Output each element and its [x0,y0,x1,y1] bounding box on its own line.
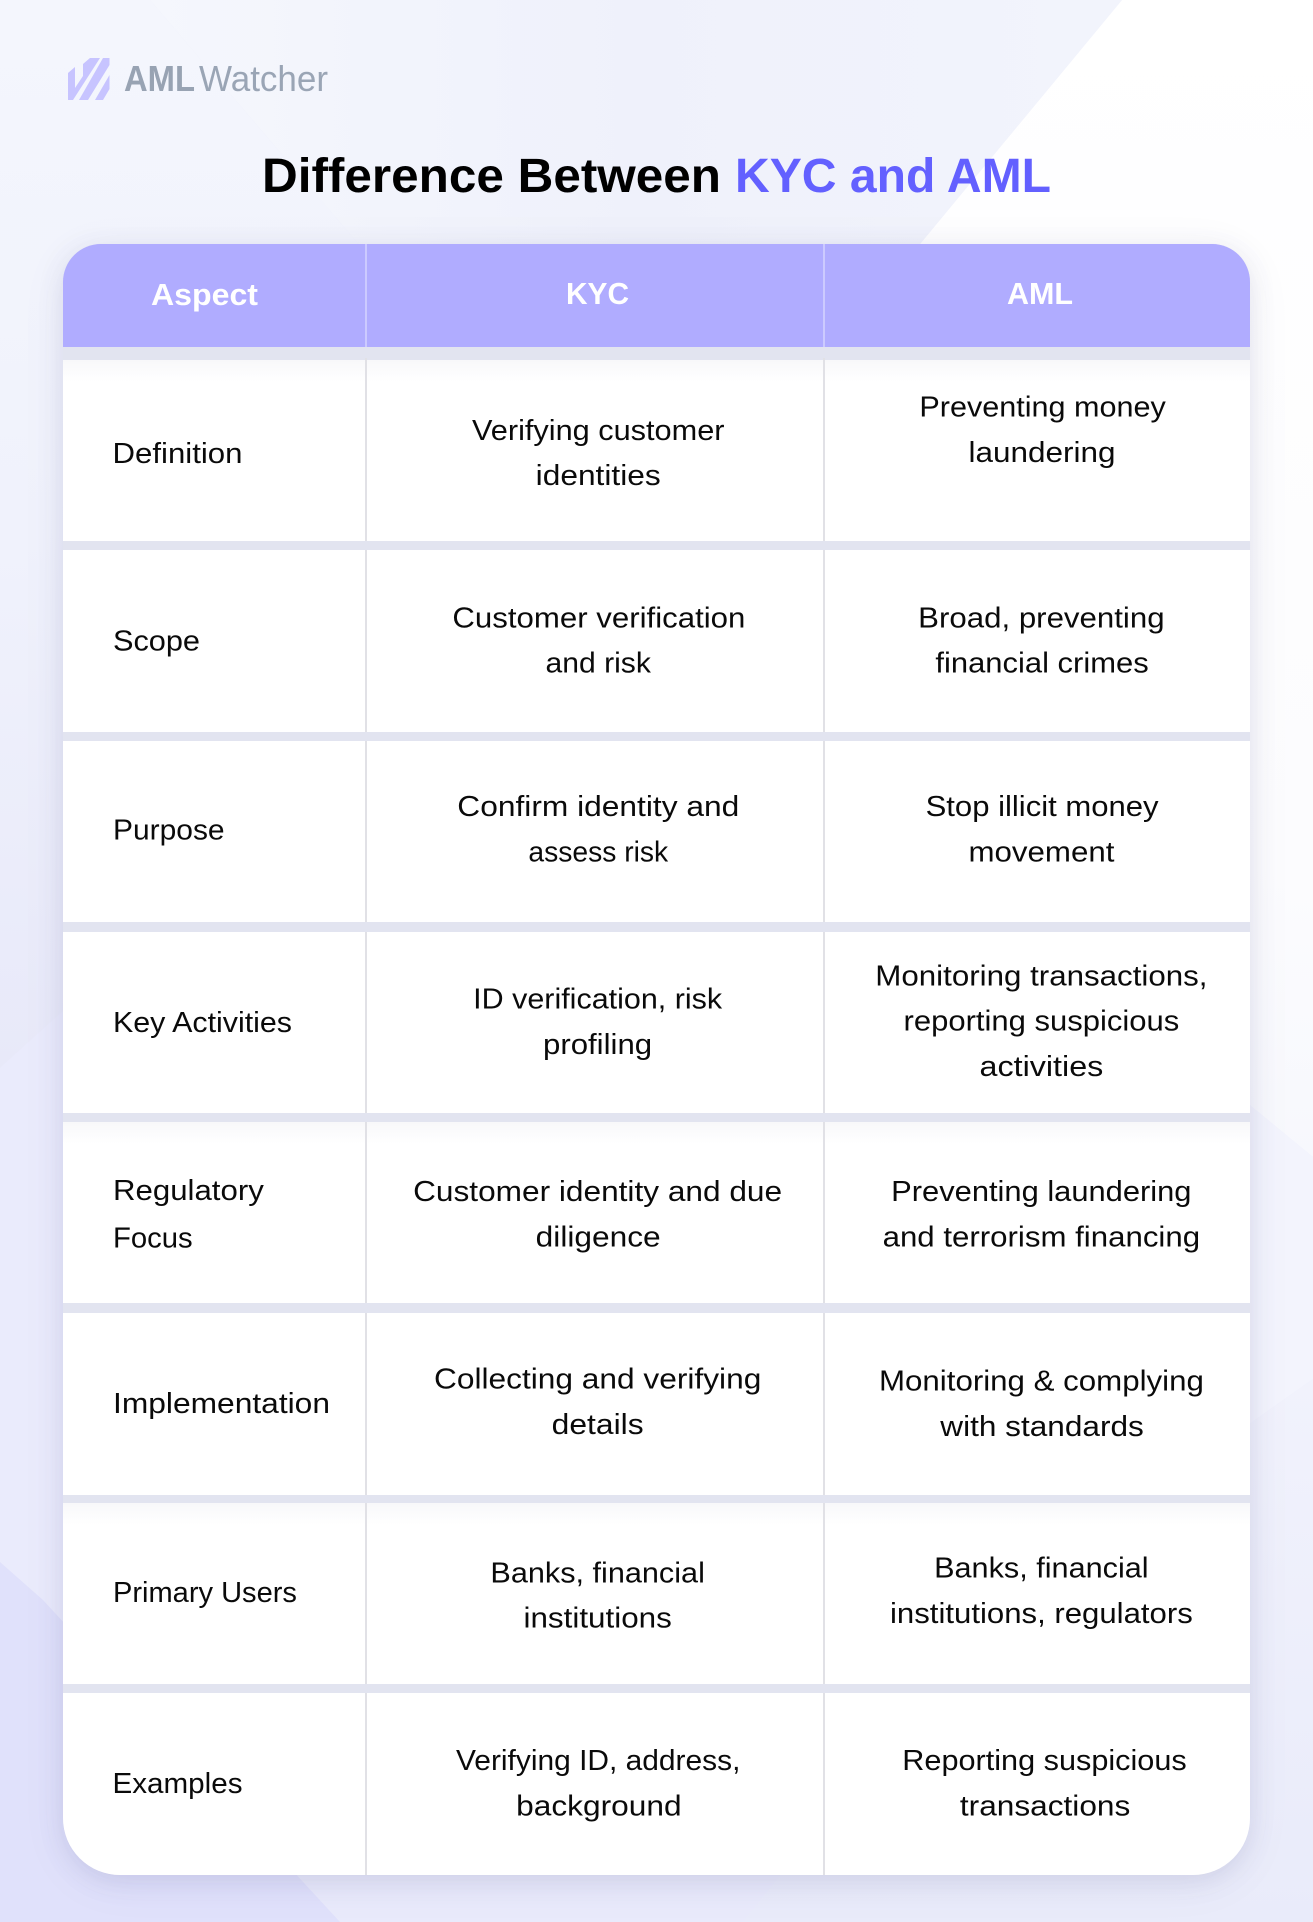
aspect: Scope: Scope [113,626,200,658]
KYC: Examples: background [516,1790,682,1822]
icon: striped logo mark [68,58,110,100]
AML: Examples: Reporting suspicious [902,1745,1187,1777]
AML: Examples [902,1745,1187,1822]
KYC: Regulatory Focus: Customer identity and due [413,1176,782,1208]
AML: Key Activities [875,960,1208,1083]
aspect: Regulatory Focus: Regulatory [113,1175,264,1207]
AML: Implementation: Monitoring & complying [879,1366,1204,1398]
KYC: Scope: Customer verification [452,602,745,634]
KYC: Key Activities [473,984,723,1061]
KYC: Definition: identities [536,460,661,492]
aspect: Regulatory Focus [113,1175,264,1255]
row: Scope [63,550,1250,732]
AML: Purpose: Stop illicit money [926,791,1159,823]
AML: Scope: Broad, preventing [918,602,1165,634]
header: KYC: KYC [566,276,629,311]
logo wordmark [124,58,328,99]
AML: Regulatory Focus: Preventing laundering [891,1176,1192,1208]
logo wordmark: Watcher [199,58,328,99]
KYC: Implementation: details [552,1409,644,1441]
title: Difference Between [262,150,721,203]
AML: Primary Users: Banks, financial [934,1552,1149,1584]
AML: Purpose: movement [968,836,1114,868]
KYC: Key Activities: profiling [543,1029,652,1061]
logo [68,58,328,100]
KYC: Primary Users: institutions [524,1603,672,1635]
header: Aspect: Aspect [151,277,258,312]
row: Definition [63,358,1250,541]
aspect: Regulatory Focus: Focus [113,1223,193,1255]
AML: Purpose [926,791,1159,868]
KYC: Implementation [434,1364,761,1441]
AML: Key Activities: Monitoring transactions, [875,960,1208,992]
AML: Definition: laundering [968,437,1116,469]
header: AML: AML [1007,276,1073,311]
row: Regulatory Focus [63,1122,1250,1303]
KYC: Purpose: assess risk [528,836,669,868]
AML: Implementation [879,1366,1204,1443]
AML: Regulatory Focus: and terrorism financing [883,1222,1200,1254]
logo wordmark: AML [124,58,195,99]
row: Primary Users [63,1503,1250,1684]
KYC: Primary Users: Banks, financial [490,1557,705,1589]
aspect: Implementation: Implementation [113,1388,330,1420]
AML: Examples: transactions [960,1790,1130,1822]
title [262,150,1051,203]
AML: Primary Users: institutions, regulators [890,1598,1193,1630]
table header [63,244,1250,347]
aspect: Purpose: Purpose [113,814,225,846]
KYC: Examples: Verifying ID, address, [456,1745,740,1777]
KYC: Key Activities: ID verification, risk [473,984,723,1016]
AML: Key Activities: reporting suspicious [904,1006,1179,1038]
KYC: Definition: Verifying customer [472,415,725,447]
aspect: Key Activities: Key Activities [113,1007,292,1039]
AML: Definition [919,392,1166,469]
aspect: Primary Users: Primary Users [113,1577,297,1609]
aspect: Definition: Definition [112,438,242,470]
AML: Implementation: with standards [939,1411,1144,1443]
row: Purpose [63,741,1250,922]
KYC: Definition [472,415,725,492]
KYC: Scope [452,602,745,680]
KYC: Primary Users [490,1557,705,1635]
KYC: Implementation: Collecting and verifying [434,1364,761,1396]
AML: Key Activities: activities [980,1051,1103,1083]
KYC: Purpose: Confirm identity and [457,791,739,823]
row: Key Activities [63,932,1250,1113]
KYC: Regulatory Focus [413,1176,782,1254]
row: Implementation [63,1313,1250,1495]
KYC: Scope: and risk [546,648,651,680]
row: Examples [63,1693,1250,1875]
title: KYC and AML [735,150,1051,203]
table shadow and backing [63,244,1250,1875]
KYC: Regulatory Focus: diligence [536,1222,661,1254]
AML: Definition: Preventing money [919,392,1166,424]
KYC: Purpose [457,791,739,868]
AML: Primary Users [890,1552,1193,1630]
KYC: Examples [456,1745,740,1822]
AML: Scope: financial crimes [935,648,1149,680]
AML: Regulatory Focus [883,1176,1200,1254]
AML: Scope [918,602,1165,680]
aspect: Examples: Examples [112,1768,242,1800]
